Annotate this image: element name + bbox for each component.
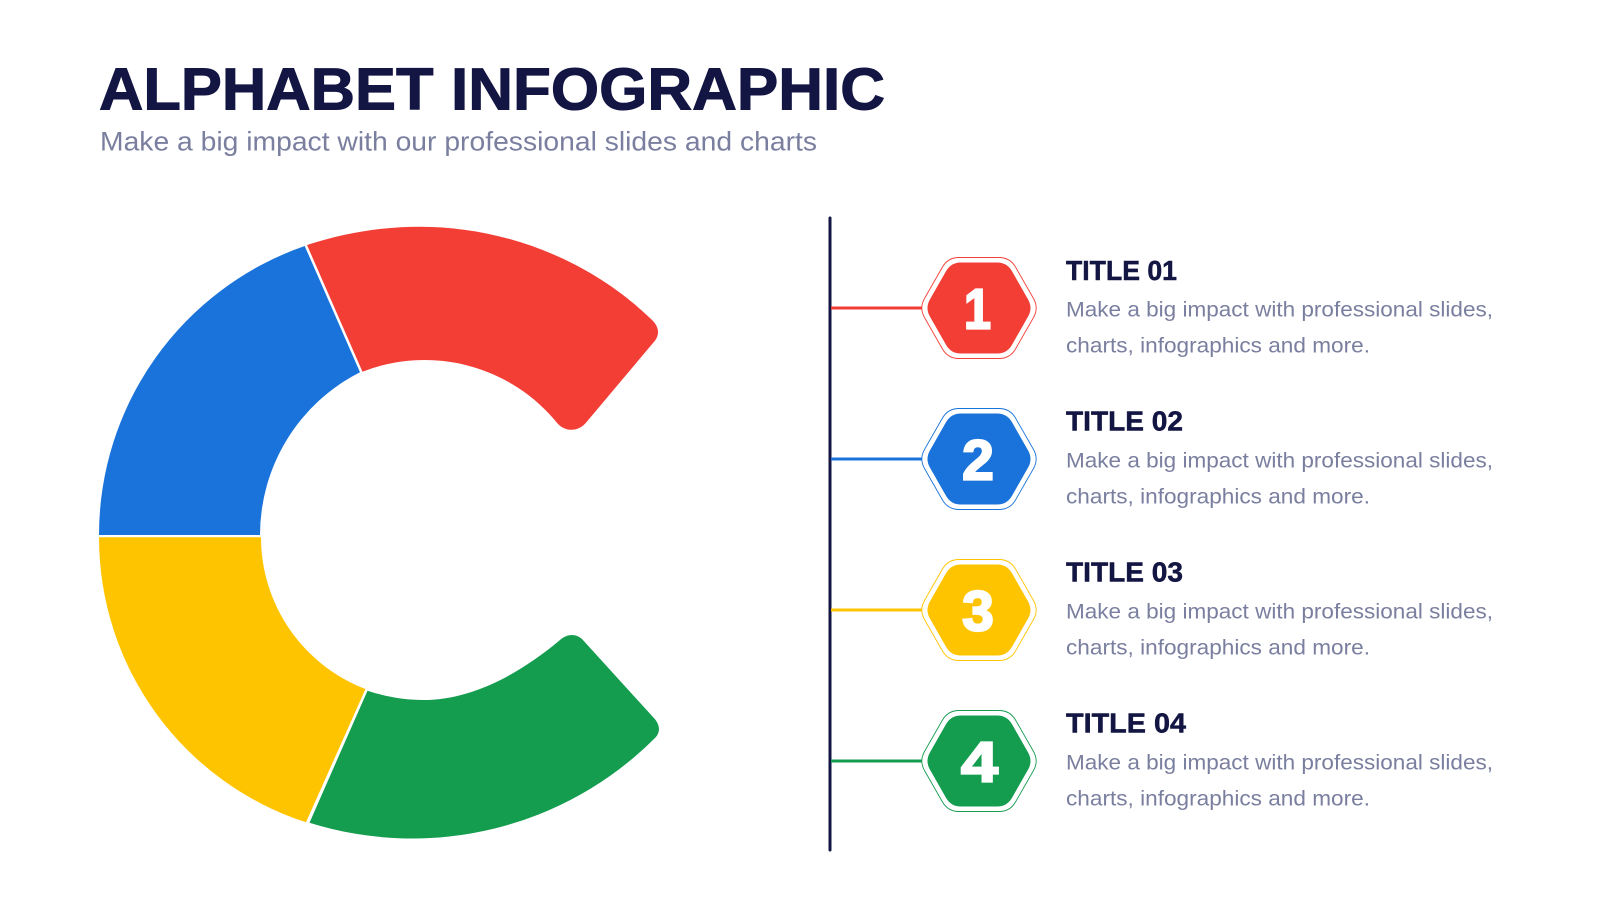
item 3 description	[1066, 600, 1493, 660]
chart: letter C donut	[99, 227, 659, 839]
item 2	[831, 406, 1493, 510]
hexagon badge 1: 1	[964, 278, 991, 342]
hexagon badge 4	[922, 710, 1036, 812]
item 2 description	[1066, 448, 1493, 508]
segment: red	[307, 227, 658, 430]
hexagon badge 2: 2	[962, 428, 994, 492]
item 1	[831, 255, 1493, 359]
title: ALPHABET	[99, 56, 434, 122]
item 1 description: charts, infographics and more.	[1066, 334, 1370, 358]
segment: yellow	[99, 537, 365, 822]
subtitle: Make a big impact with our professional slides and charts	[100, 126, 817, 156]
connector 4	[831, 760, 922, 762]
item 3 title: TITLE 03	[1066, 556, 1183, 588]
hexagon badge 4: 4	[961, 730, 998, 794]
item 4 description: charts, infographics and more.	[1066, 786, 1370, 810]
item 4 description	[1066, 750, 1493, 810]
item 4	[831, 708, 1493, 812]
hexagon badge 3: 3	[962, 580, 994, 644]
vertical axis line	[828, 218, 832, 850]
title: INFOGRAPHIC	[451, 56, 885, 122]
hexagon badge 2	[922, 408, 1036, 510]
hexagon badge 1	[922, 257, 1036, 359]
connector 2	[831, 458, 922, 460]
item 2 description: Make a big impact with professional slides,	[1066, 448, 1493, 472]
item 1 description	[1066, 298, 1493, 358]
item 4 description: Make a big impact with professional slides,	[1066, 750, 1493, 774]
connector 3	[831, 608, 922, 612]
item 3 description: charts, infographics and more.	[1066, 636, 1370, 660]
item 1 title: TITLE 01	[1066, 255, 1177, 286]
segment: green	[310, 635, 659, 839]
item 3	[831, 556, 1493, 661]
item 2 description: charts, infographics and more.	[1066, 484, 1370, 508]
hexagon badge 3	[922, 559, 1036, 661]
item 4 title: TITLE 04	[1066, 708, 1187, 738]
item 1 description: Make a big impact with professional slides,	[1066, 298, 1493, 322]
connector 1	[831, 306, 922, 310]
title	[99, 56, 885, 122]
segment: blue	[99, 246, 360, 535]
item 3 description: Make a big impact with professional slides,	[1066, 600, 1493, 624]
item 2 title: TITLE 02	[1066, 406, 1183, 436]
